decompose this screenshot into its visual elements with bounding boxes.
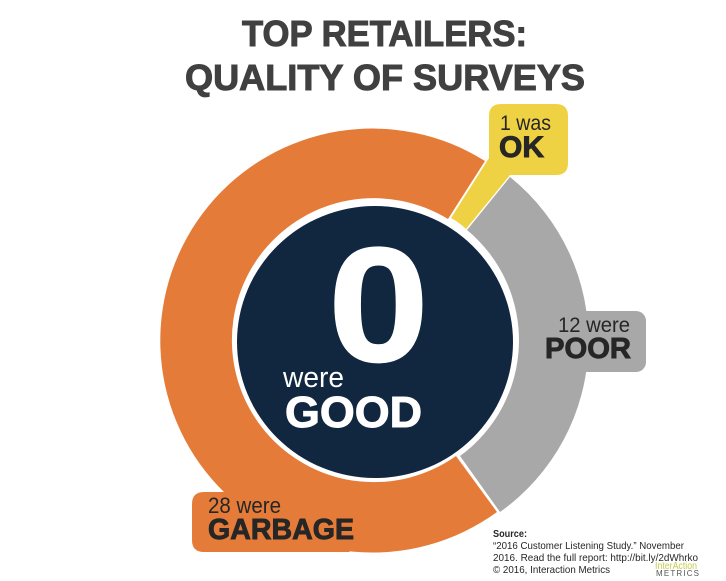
logo: InterAction Metrics xyxy=(655,561,699,578)
source note: “2016 Customer Listening Study.” November xyxy=(493,540,684,552)
label: GARBAGE: GARBAGE xyxy=(208,514,354,546)
source note xyxy=(493,528,698,576)
label: OK: OK xyxy=(499,131,544,164)
logo: InterAction Metrics: InterAction xyxy=(655,561,697,572)
label: 12 were: 12 were xyxy=(558,314,630,337)
source note: © 2016, Interaction Metrics xyxy=(493,564,610,576)
big zero: 0 xyxy=(328,213,429,396)
label: 1 was: 1 was xyxy=(500,112,551,135)
label: 28 were: 28 were xyxy=(208,493,281,518)
panel: poor segment and callout xyxy=(460,177,646,512)
title: TOP RETAILERS: xyxy=(242,13,527,54)
source note: Source: xyxy=(493,528,527,540)
title: QUALITY OF SURVEYS xyxy=(185,57,585,98)
label: were: were xyxy=(282,362,344,394)
title xyxy=(185,13,585,98)
panel: ok callout xyxy=(451,104,568,229)
source note: 2016. Read the full report: http://bit.ly/2dWhrko xyxy=(493,552,698,564)
label: GOOD: GOOD xyxy=(285,388,422,437)
label: POOR: POOR xyxy=(545,333,631,365)
logo: InterAction Metrics: METRICS xyxy=(656,569,699,578)
panel: good centre circle xyxy=(237,206,513,478)
panel: garbage segment and callout xyxy=(160,129,497,553)
